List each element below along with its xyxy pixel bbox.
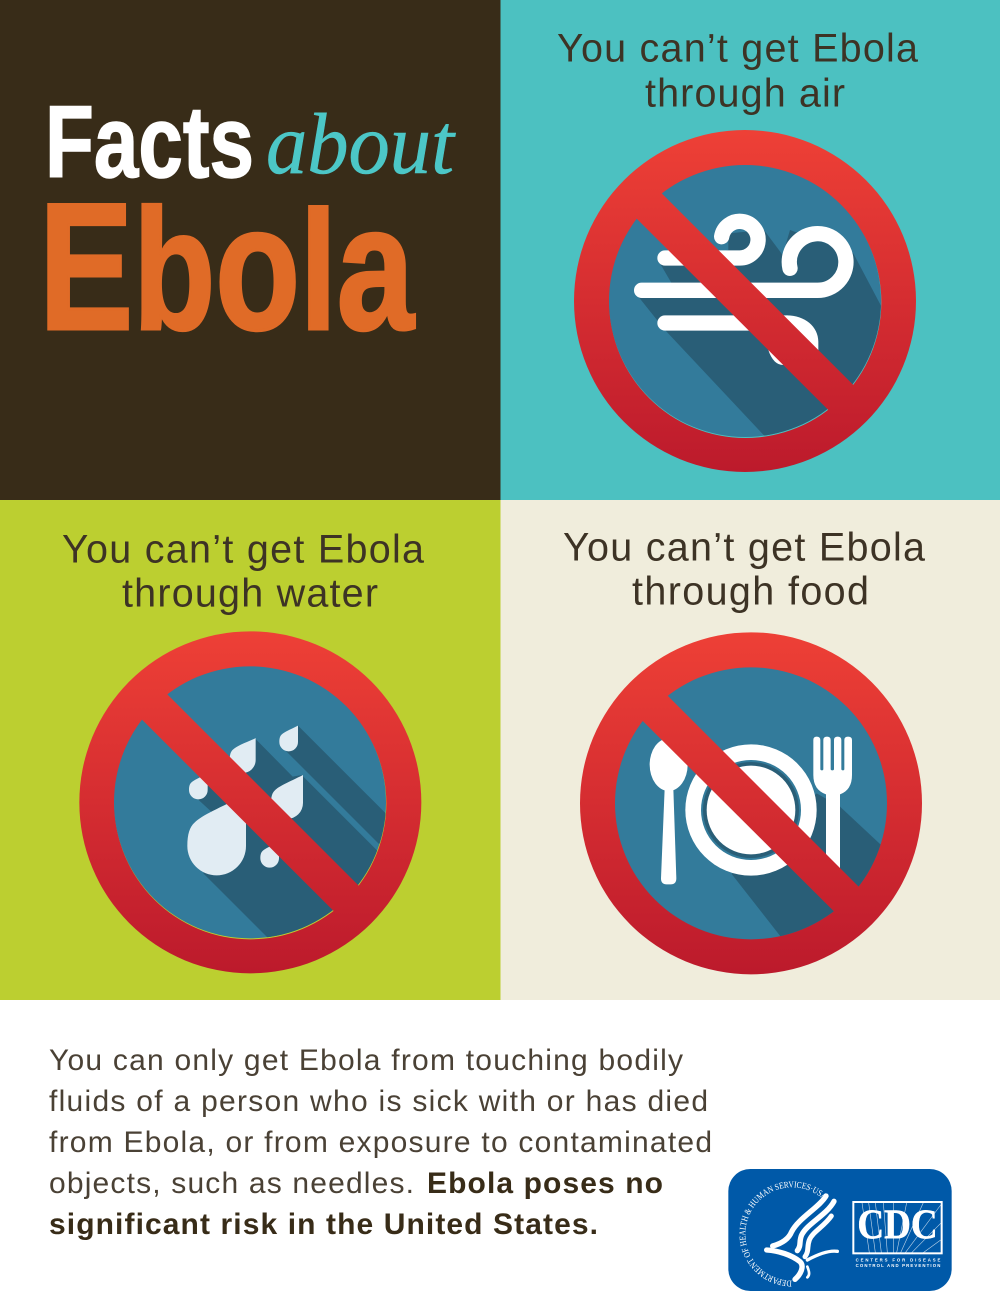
icon: no water — [79, 631, 421, 973]
heading: through air: through air — [645, 72, 845, 116]
CDC name — [856, 1257, 940, 1268]
heading: through air: You can’t get Ebola — [557, 26, 918, 70]
HHS eagle — [767, 1196, 837, 1279]
CDC name: CENTERS FOR DISEASE — [856, 1257, 940, 1262]
CDC box: CDC — [857, 1202, 938, 1248]
icon: no wind — [574, 130, 916, 472]
heading: through water: You can’t get Ebola — [62, 528, 424, 572]
icon: no food — [580, 632, 922, 974]
plate — [685, 744, 817, 876]
text block: how Ebola spreads: Ebola poses no — [427, 1167, 663, 1200]
heading: through food: through food — [632, 570, 869, 614]
CDC name: CONTROL AND PREVENTION — [856, 1263, 940, 1268]
heading: through water: through water — [122, 572, 378, 616]
logo: HHS and CDC — [728, 1169, 952, 1291]
title: Facts: Facts — [45, 85, 254, 199]
text block: how Ebola spreads: from Ebola, or from exposure to contaminated — [49, 1126, 712, 1159]
panel: title — [0, 0, 500, 500]
heading: through food — [563, 526, 925, 614]
text block: how Ebola spreads: significant risk in the United States. — [49, 1208, 598, 1241]
panel: air — [500, 0, 1000, 500]
fork — [813, 737, 852, 873]
heading: through food: You can’t get Ebola — [563, 526, 925, 570]
HHS seal text: DEPARTMENT OF HEALTH & HUMAN SERVICES·USA — [739, 1181, 826, 1287]
panel: food — [500, 500, 1000, 1000]
text block: how Ebola spreads: objects, such as needles. — [49, 1167, 414, 1200]
text block: how Ebola spreads — [49, 1044, 712, 1241]
text block: how Ebola spreads: fluids of a person who is sick with or has died — [49, 1085, 708, 1118]
title: Ebola: Ebola — [39, 166, 416, 368]
heading: through water — [62, 528, 424, 616]
panel: water — [0, 500, 500, 1000]
title: about: about — [266, 95, 456, 192]
spoon — [650, 738, 688, 884]
text block: how Ebola spreads: You can only get Ebola from touching bodily — [49, 1044, 683, 1077]
heading: through air — [557, 26, 918, 116]
